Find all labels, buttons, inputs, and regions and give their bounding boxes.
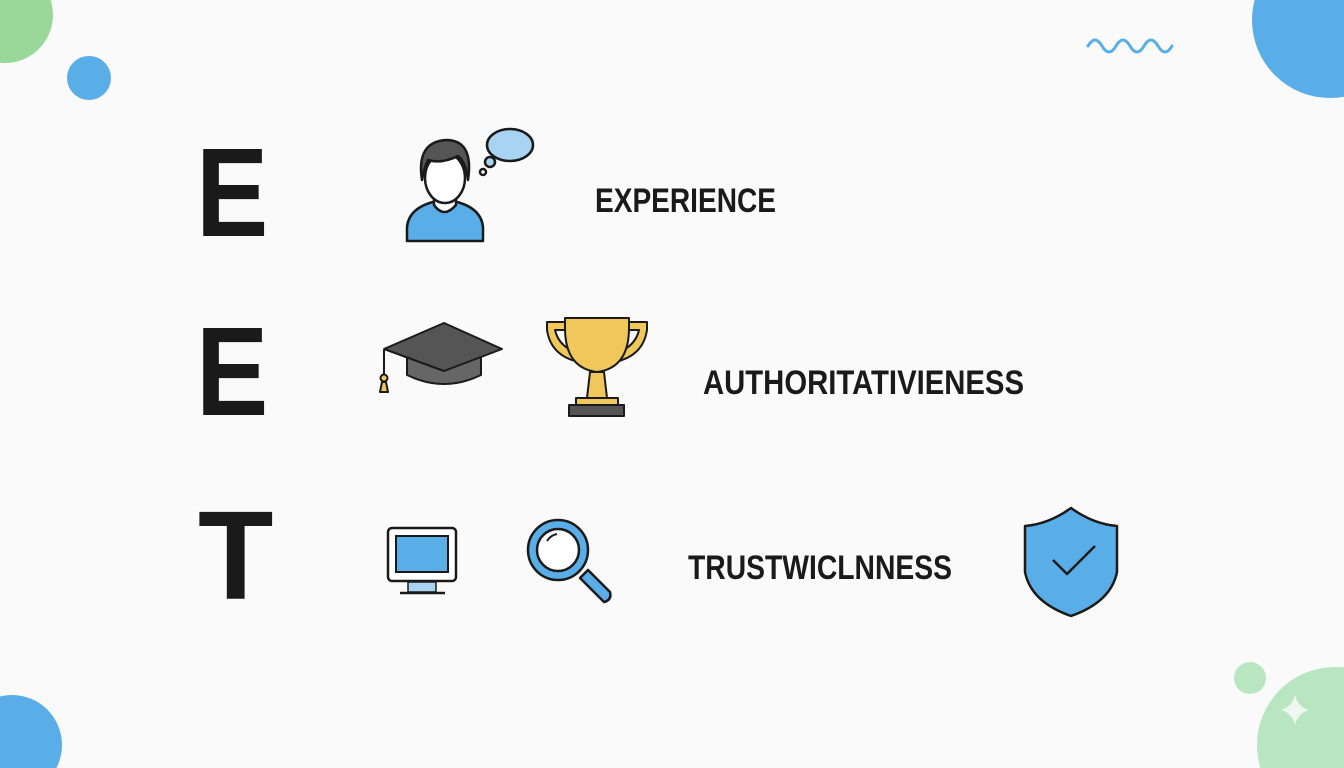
icon: magnifier: [528, 520, 610, 602]
icon: monitor: [388, 528, 456, 593]
icon: trophy: [547, 318, 647, 416]
decoration: small green circle: [1234, 662, 1266, 694]
decoration: top-left green circle: [0, 0, 53, 63]
label: authoritativieness: AUTHORITATIVIENESS: [703, 364, 1024, 402]
decoration: blue dot: [67, 56, 111, 100]
letter E 2: E: [196, 301, 268, 442]
letter T: T: [198, 486, 273, 626]
icon: shield with check: [1025, 508, 1117, 616]
decoration: bottom-right green circle: [1257, 667, 1344, 768]
letter E: E: [196, 122, 268, 263]
decoration: wave: [1088, 40, 1172, 52]
decoration: sparkle: [1281, 695, 1309, 725]
decoration: bottom-left blue circle: [0, 695, 62, 768]
decoration: top-right blue circle: [1252, 0, 1344, 98]
icon: graduation cap: [380, 323, 502, 392]
label: trustwiclnness: TRUSTWICLNNESS: [688, 549, 952, 587]
icon: person with thought bubble: [407, 129, 533, 241]
label: experience: EXPERIENCE: [595, 182, 776, 220]
